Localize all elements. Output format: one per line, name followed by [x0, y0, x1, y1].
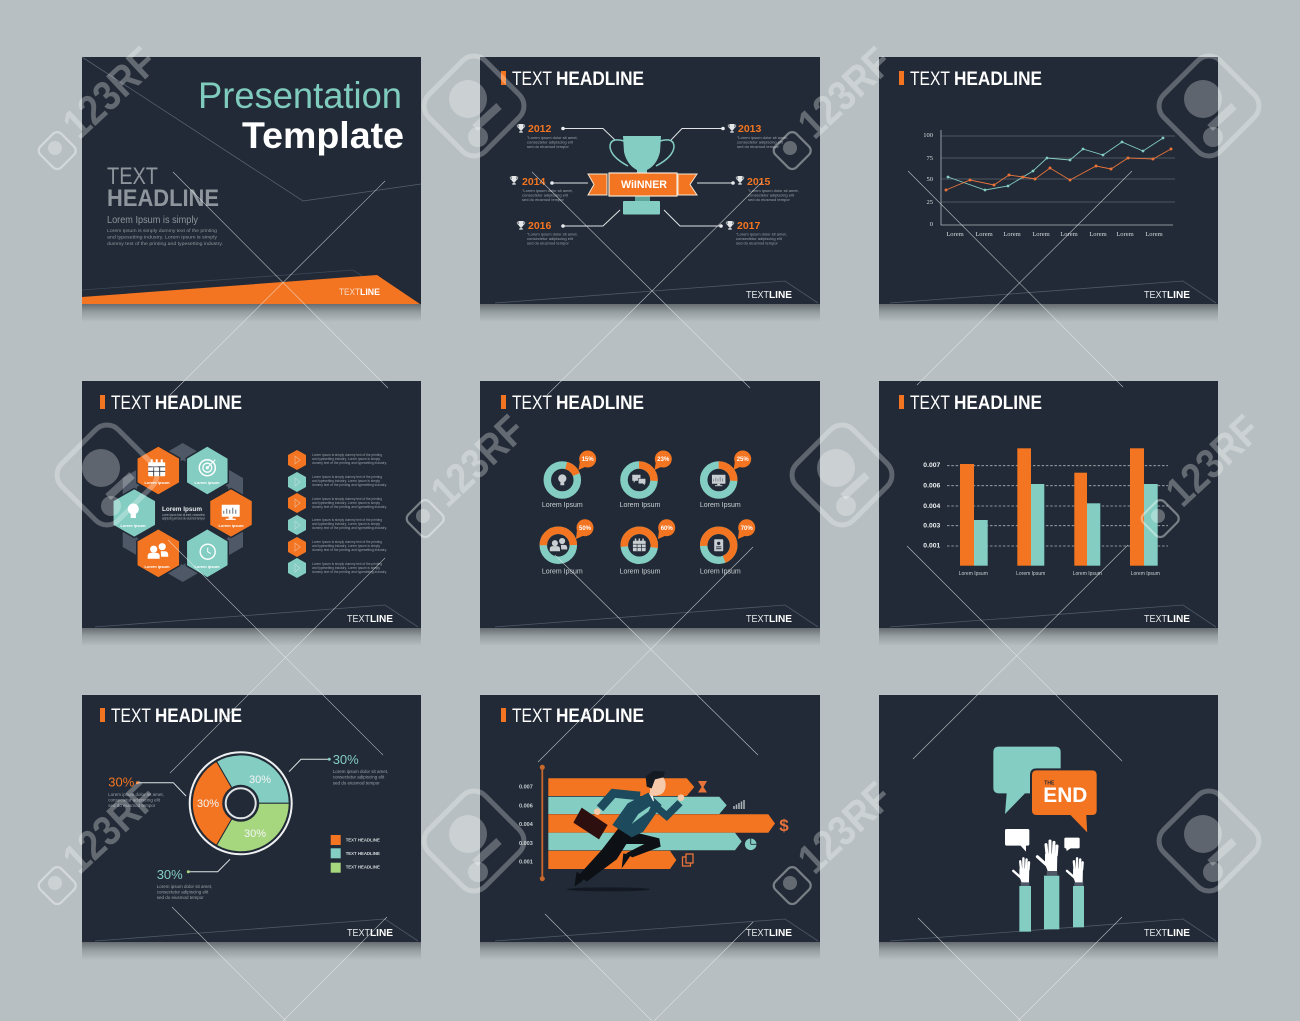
bar chart: 0.001: [923, 542, 941, 550]
connectors: [550, 127, 735, 228]
line chart: Lorem: [1032, 231, 1050, 238]
arrow icons: $: [779, 816, 789, 835]
callout: left: consectetur adipiscing elit: [108, 798, 161, 802]
textline: TEXT: [1144, 614, 1167, 625]
heading: [100, 393, 242, 414]
textline: LINE: [1167, 614, 1190, 625]
textline: [746, 290, 792, 301]
year entries: "Lorem ipsum dolor sit amet,: [736, 232, 787, 236]
textline: TEXT: [347, 614, 370, 625]
year entries: sed do eiusmod tempor: [522, 197, 564, 202]
line chart: Lorem: [1145, 231, 1163, 238]
panel: hexagon diagram: [82, 381, 421, 628]
bar chart: 0.006: [923, 482, 941, 490]
callout: right: [289, 752, 388, 786]
bullet list: dummy text of the printing and typesetting industry.: [312, 570, 387, 574]
line chart: Lorem: [1116, 231, 1134, 238]
textline: LINE: [1167, 928, 1190, 939]
bar chart: Lorem Ipsum: [1073, 571, 1102, 577]
year entries: sed do eiusmod tempor: [527, 144, 569, 149]
callout: right: Lorem ipsum dolor sit amet,: [333, 769, 388, 774]
bar chart: 0.004: [923, 503, 941, 510]
cover headline and text: Lorem Ipsum is simply: [107, 215, 198, 226]
year entries: 2016: [528, 220, 552, 232]
year entries: 2017: [737, 220, 761, 232]
bar chart: Lorem Ipsum: [1131, 571, 1160, 577]
heading: [899, 393, 1042, 414]
percent bubbles: 23%: [657, 457, 670, 463]
bullet list: dummy text of the printing and typesetting industry.: [312, 461, 387, 465]
pie chart: 30%: [244, 828, 266, 840]
year entries: consectetur adipiscing elit: [527, 140, 574, 144]
textline: TEXT: [339, 287, 360, 298]
bar chart: Lorem Ipsum: [1016, 571, 1045, 577]
end text: END: [1043, 784, 1087, 807]
pie chart: 30%: [249, 774, 271, 786]
heading: [501, 69, 644, 90]
donut labels: [542, 502, 741, 576]
cover title: Template: [242, 115, 404, 156]
panel: segmented pie: [82, 695, 421, 942]
year entries: "Lorem ipsum dolor sit amet,: [737, 135, 788, 140]
year entries: 2014: [522, 176, 546, 188]
textline: TEXT: [746, 614, 769, 625]
bullet list: and typesetting industry. Lorem Ipsum is simply: [312, 544, 380, 548]
hexagon cluster: Lorem ipsum: [120, 523, 146, 528]
textline: [1144, 928, 1190, 939]
textline: LINE: [769, 614, 792, 625]
hexagon cluster: Lorem ipsum: [194, 480, 220, 485]
textline: LINE: [370, 928, 393, 939]
cover title: Presentation: [198, 75, 402, 116]
pie chart: [190, 752, 292, 854]
donut icons: [550, 474, 725, 551]
year entries: "Lorem ipsum dolor sit amet,: [748, 188, 799, 193]
textline: LINE: [769, 290, 792, 301]
bullet list: Lorem Ipsum is simply dummy text of the printing: [312, 562, 382, 566]
trophy: [588, 136, 697, 214]
watermark: 123RF logos: 123RF: [421, 406, 534, 515]
bullet list: and typesetting industry. Lorem Ipsum is simply: [312, 457, 380, 461]
callout: left: 30%: [108, 775, 135, 790]
watermark: 123RF logos: 123RF: [1156, 406, 1269, 515]
percent bubbles: 60%: [661, 526, 673, 532]
callout: bottom: [157, 859, 230, 900]
vertical axis: 0.006: [519, 804, 533, 810]
hexagon cluster: Lorem ipsum dolor sit amet, consectetur: [162, 513, 206, 517]
donut labels: Lorem Ipsum: [620, 568, 661, 576]
hexagon cluster: [113, 443, 252, 582]
speech bubbles and hands: [993, 747, 1098, 932]
line chart: [923, 130, 1175, 238]
panel: line chart: [879, 57, 1218, 304]
cover headline and text: dummy text of the printing and typesetting industry.: [107, 241, 223, 247]
bullet list: and typesetting industry. Lorem Ipsum is simply: [312, 479, 380, 483]
bullet list: Lorem Ipsum is simply dummy text of the printing: [312, 518, 382, 522]
vertical axis: [519, 765, 545, 881]
bullet list: Lorem Ipsum is simply dummy text of the printing: [312, 475, 382, 479]
bar chart: 0.003: [923, 522, 941, 530]
year entries: sed do eiusmod tempor: [737, 144, 779, 149]
heading: [501, 706, 644, 727]
bullet list: and typesetting industry. Lorem Ipsum is simply: [312, 501, 380, 505]
arrow icons: [682, 781, 789, 866]
year entries: consectetur adipiscing elit: [736, 236, 783, 241]
bullet list: dummy text of the printing and typesetting industry.: [312, 483, 387, 487]
bullet list: and typesetting industry. Lorem Ipsum is simply: [312, 522, 380, 526]
textline: TEXT: [746, 928, 769, 939]
hexagon cluster: Lorem ipsum: [144, 480, 170, 485]
bullet list: Lorem Ipsum is simply dummy text of the printing: [312, 497, 382, 501]
orange footer band: [82, 275, 420, 304]
textline: LINE: [769, 928, 792, 939]
cover headline and text: [107, 163, 223, 247]
bar chart: Lorem Ipsum: [959, 571, 988, 577]
watermark: camera outlines: [50, 49, 1266, 898]
legend: TEXT HEADLINE: [346, 864, 380, 870]
bullet list: [288, 450, 387, 578]
bullet list: Lorem Ipsum is simply dummy text of the printing: [312, 540, 382, 544]
percent bubbles: 15%: [582, 457, 594, 463]
callout: left: sed do eiusmod tempor: [108, 803, 156, 808]
line chart: 75: [926, 155, 933, 162]
watermark: 123RF logos: [53, 38, 1269, 882]
line chart: Lorem: [1003, 231, 1021, 238]
line chart: 100: [923, 132, 933, 139]
year entries: 2012: [528, 123, 552, 135]
panel: running businessman: [480, 695, 820, 942]
panel: cover slide: [82, 57, 421, 304]
vertical axis: 0.001: [519, 860, 533, 866]
legend: [331, 835, 380, 873]
callout: right: consectetur adipiscing elit: [333, 774, 385, 780]
hexagon cluster: adipiscing elit sed do eiusmod tempor: [162, 516, 206, 520]
watermark: 123RF logos: 123RF: [788, 38, 901, 147]
textline: [1144, 290, 1190, 301]
line chart: Lorem: [946, 231, 964, 238]
textline: [1144, 614, 1190, 625]
percent bubbles: 70%: [741, 526, 753, 532]
panel shadows: [82, 304, 1218, 960]
donut labels: Lorem Ipsum: [542, 502, 583, 509]
callout: left: Lorem ipsum dolor sit amet,: [108, 792, 164, 797]
textline: [347, 614, 393, 625]
vertical axis: 0.007: [519, 784, 533, 790]
year entries: consectetur adipiscing elit: [527, 236, 574, 241]
bar chart: 0.007: [923, 462, 941, 469]
heading: HEADLINE: [556, 706, 644, 727]
bullet list: dummy text of the printing and typesetting industry.: [312, 526, 387, 530]
line chart: Lorem: [1060, 231, 1078, 238]
hexagon cluster: Lorem ipsum: [218, 523, 244, 528]
line chart: Lorem: [975, 231, 993, 238]
donut labels: Lorem Ipsum: [620, 502, 661, 509]
heading: HEADLINE: [155, 706, 242, 727]
hexagon cluster: Lorem Ipsum: [162, 507, 202, 513]
panel: winner timeline: [480, 57, 820, 304]
year entries: consectetur adipiscing elit: [748, 192, 795, 198]
panel: the end: [879, 695, 1218, 942]
vertical axis: 0.003: [519, 841, 533, 847]
bullet list: dummy text of the printing and typesetting industry.: [312, 505, 387, 509]
line chart: 0: [930, 221, 933, 228]
arrow bars: [548, 778, 775, 869]
cover title: [198, 75, 404, 156]
bar chart: [923, 448, 1168, 577]
callout: left: [108, 775, 186, 808]
heading: TEXT: [111, 706, 151, 727]
hexagon cluster: Lorem ipsum: [144, 564, 170, 569]
watermark: 123RF logos: 123RF: [53, 38, 166, 147]
heading: [501, 393, 644, 414]
donut labels: Lorem Ipsum: [700, 568, 741, 576]
year entries: "Lorem ipsum dolor sit amet,: [527, 232, 578, 236]
callout: bottom: Lorem ipsum dolor sit amet,: [157, 884, 212, 889]
bullet list: and typesetting industry. Lorem Ipsum is simply: [312, 566, 380, 570]
bullet list: Lorem Ipsum is simply dummy text of the printing: [312, 453, 382, 457]
heading: TEXT: [910, 69, 950, 90]
heading: HEADLINE: [954, 393, 1042, 414]
textline: [347, 928, 393, 939]
heading: TEXT: [910, 393, 950, 414]
trophy: WiINNER: [621, 179, 667, 191]
year entries: 2015: [747, 176, 771, 188]
donut labels: Lorem Ipsum: [542, 568, 583, 576]
textline: [339, 287, 380, 298]
callout: bottom: consectetur adipiscing elit: [157, 890, 209, 894]
year entries: sed do eiusmod tempor: [527, 240, 569, 246]
heading: TEXT: [512, 69, 552, 90]
year entries: sed do eiusmod tempor: [748, 197, 790, 202]
heading: TEXT: [512, 706, 552, 727]
legend: TEXT HEADLINE: [346, 838, 380, 842]
heading: [100, 706, 242, 727]
legend: TEXT HEADLINE: [346, 851, 380, 856]
watermark: 123RF logos: 123RF: [53, 773, 166, 882]
heading: [899, 69, 1042, 90]
callout: bottom: sed do eiusmod tempor: [157, 895, 204, 900]
line chart: 25: [926, 199, 933, 206]
percent bubbles: 25%: [737, 457, 749, 463]
panel: donut percentages: [480, 381, 820, 628]
bullet list: dummy text of the printing and typesetting industry.: [312, 548, 387, 552]
line chart: Lorem: [1089, 231, 1107, 238]
textline: [746, 928, 792, 939]
panel: bar chart: [879, 381, 1218, 628]
vertical axis: 0.004: [519, 822, 534, 828]
percent bubbles: 50%: [579, 526, 592, 532]
year entries: 2013: [738, 123, 762, 135]
textline: LINE: [360, 287, 380, 298]
end text: THE: [1044, 780, 1055, 786]
year entries: consectetur adipiscing elit: [522, 192, 569, 198]
textline: LINE: [370, 614, 393, 625]
textline: [746, 614, 792, 625]
percent bubbles: [576, 450, 755, 539]
donut rings: [543, 462, 734, 562]
textline: LINE: [1167, 290, 1190, 301]
heading: HEADLINE: [556, 69, 644, 90]
line chart: 50: [926, 176, 933, 183]
heading: HEADLINE: [556, 393, 644, 414]
year entries: "Lorem ipsum dolor sit amet,: [522, 188, 573, 193]
year entries: "Lorem ipsum dolor sit amet,: [527, 135, 578, 140]
businessman: [567, 771, 684, 891]
year entries: [510, 123, 799, 246]
textline: TEXT: [1144, 290, 1167, 301]
callout: right: 30%: [333, 752, 359, 767]
heading: TEXT: [111, 393, 151, 414]
textline: TEXT: [1144, 928, 1167, 939]
heading: HEADLINE: [954, 69, 1042, 90]
heading: HEADLINE: [155, 393, 242, 414]
cover headline and text: TEXT: [107, 163, 158, 190]
pie chart: 30%: [197, 798, 219, 810]
year entries: consectetur adipiscing elit: [737, 140, 784, 144]
heading: TEXT: [512, 393, 552, 414]
hexagon cluster: Lorem ipsum: [194, 564, 220, 569]
cover headline and text: Lorem Ipsum is simply dummy text of the printing: [107, 228, 217, 234]
callout: right: sed do eiusmod tempor: [333, 780, 380, 786]
callout: bottom: 30%: [157, 867, 183, 882]
cover headline and text: HEADLINE: [107, 185, 219, 212]
textline: TEXT: [347, 928, 370, 939]
textline: TEXT: [746, 290, 769, 301]
watermark: 123RF logos: 123RF: [788, 773, 901, 882]
donut labels: Lorem Ipsum: [700, 502, 741, 509]
cover headline and text: and typesetting industry. Lorem Ipsum is simply: [107, 234, 218, 240]
year entries: sed do eiusmod tempor: [736, 240, 778, 246]
